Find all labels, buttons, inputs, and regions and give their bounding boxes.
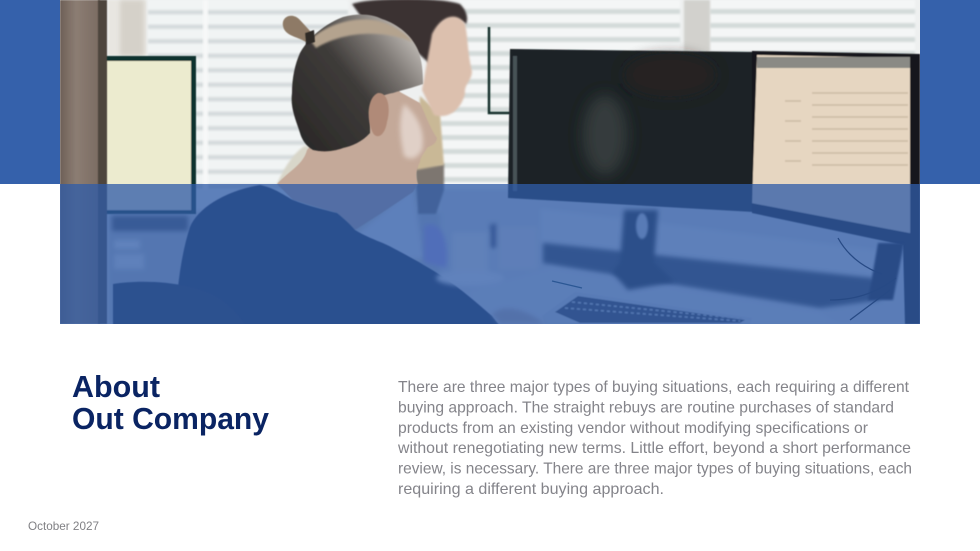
desk front [470,268,840,324]
body paragraph: products from an existing vendor without modifying specifications or [398,420,869,437]
curtain [60,0,100,324]
desk shelf light [540,208,880,285]
purple object [424,224,447,268]
woman's pale blouse shoulder [276,146,310,184]
desk surface [110,215,438,320]
body paragraph: review, is necessary. There are three major types of buying situations, each [398,460,912,478]
man's ear [369,93,389,136]
man's hair bun [283,16,315,45]
body paragraph [397,379,912,498]
left desk items [112,216,188,269]
hand on desk [492,309,545,324]
big dark monitor [508,49,754,212]
left monitor [104,56,196,214]
right monitor [752,51,920,324]
blind cord [203,0,208,190]
photo: two colleagues at computer monitors [60,0,920,326]
body paragraph: requiring a different buying approach. [398,481,664,498]
woman's face [422,17,472,116]
heading [72,369,270,436]
man's shirt [176,185,500,326]
wall bracket behind monitor [489,27,510,113]
woman's collar and neck [416,96,444,170]
pen on desk [552,281,582,288]
man's top hair sheen [310,19,412,48]
heading: About [72,369,160,404]
desk right [440,190,920,324]
body paragraph: buying approach. The straight rebuys are routine purchases of standard [398,400,894,416]
chair back [113,282,246,326]
man's neck and face [276,90,437,229]
right monitor stand [868,243,904,300]
cables [830,238,878,320]
man's cheek highlight [400,104,423,158]
heading: Out Company [72,401,270,436]
window blinds left [148,10,348,174]
man's hair [292,15,423,151]
curtain edge [98,0,107,324]
woman's hair [352,0,467,66]
body paragraph: There are three major types of buying situations, each requiring a different [398,379,910,396]
woman's dark garment [415,164,444,214]
body paragraph: without renegotiating new terms. Little effort, beyond a short performance [397,440,911,457]
shelf shadow [543,243,880,308]
window pillar [684,0,710,52]
stand detail [636,213,648,239]
date footer: October 2027 [28,519,99,533]
window blinds centre [440,0,680,190]
top blue band [0,0,980,184]
wall column [108,0,146,56]
wall shade [120,0,144,56]
coffee mugs [434,222,498,288]
keyboard [555,296,744,324]
monitor stand [612,210,675,290]
blue translucent overlay band [60,184,920,324]
woman's lower blouse [362,194,420,258]
window blinds right [710,9,916,54]
